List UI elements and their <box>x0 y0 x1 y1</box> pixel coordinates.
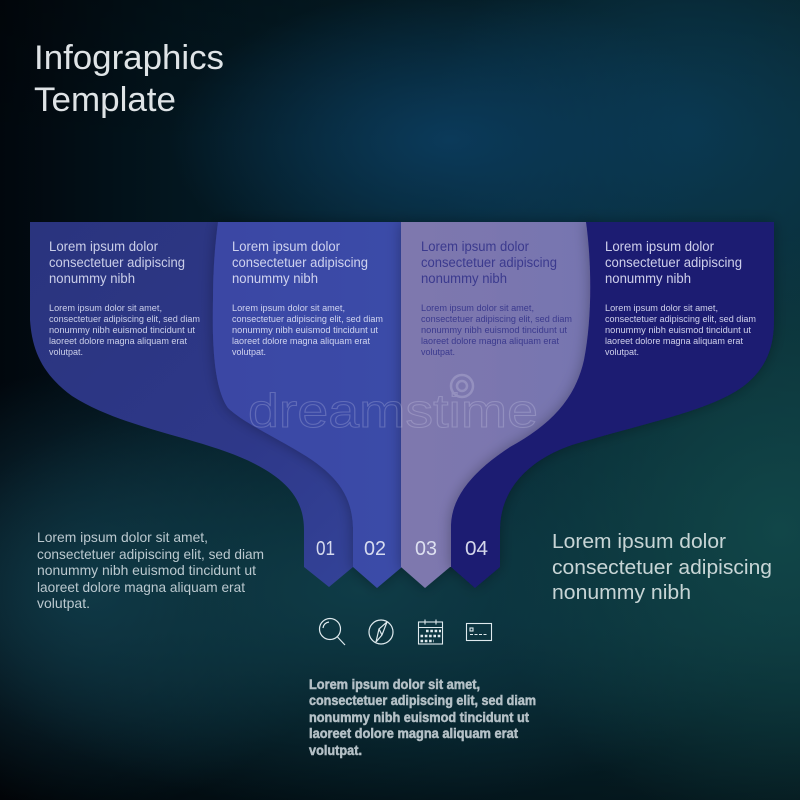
panel 3 shape <box>401 222 592 588</box>
icon: ID card <box>466 624 492 640</box>
bottom bold text block: consectetuer adipiscing elit, sed diam <box>309 692 536 708</box>
panel 2 text: consectetuer adipiscing <box>232 255 368 270</box>
panel 4 shape <box>451 222 774 588</box>
panel 4 text: nonummy nibh euismod tincidunt ut <box>605 325 751 336</box>
bottom bold text block <box>309 676 536 758</box>
bottom bold text block: laoreet dolore magna aliquam erat <box>309 725 518 741</box>
panel 1 text: Lorem ipsum dolor <box>49 239 158 254</box>
title: Infographics <box>34 39 224 77</box>
panel 2 text: nonummy nibh <box>232 271 318 286</box>
icon: magnifier <box>320 618 345 645</box>
panel 4 text: Lorem ipsum dolor sit amet, <box>605 303 718 314</box>
left text block: nonummy nibh euismod tincidunt ut <box>37 562 256 578</box>
icon: calendar <box>418 620 442 644</box>
panel 2 text: nonummy nibh euismod tincidunt ut <box>232 325 378 336</box>
panel 4 text: volutpat. <box>605 347 639 358</box>
watermark: dreamstime <box>248 384 538 437</box>
title: Template <box>34 81 176 119</box>
right text block <box>552 530 772 604</box>
panel 1 text: volutpat. <box>49 347 83 358</box>
panel 1 text <box>49 239 200 358</box>
panel 3 text: nonummy nibh <box>421 271 507 286</box>
panel 3 text: consectetuer adipiscing <box>421 255 557 270</box>
panel 4 text: nonummy nibh <box>605 271 691 286</box>
panel 2 text: Lorem ipsum dolor <box>232 239 340 254</box>
right text block: nonummy nibh <box>552 581 691 604</box>
panel 2 text: Lorem ipsum dolor sit amet, <box>232 303 345 314</box>
panel 1 text: Lorem ipsum dolor sit amet, <box>49 303 162 314</box>
step numbers <box>316 538 488 560</box>
panel 1 text: nonummy nibh euismod tincidunt ut <box>49 325 195 336</box>
left text block <box>37 529 264 611</box>
left text block: Lorem ipsum dolor sit amet, <box>37 529 208 545</box>
panel 2 text: consectetuer adipiscing elit, sed diam <box>232 314 383 325</box>
panel 4 text: consectetuer adipiscing <box>605 255 742 270</box>
panel 1 shape <box>30 222 390 587</box>
panel 4 text <box>605 239 756 358</box>
panel 2 text: laoreet dolore magna aliquam erat <box>232 336 370 347</box>
bottom bold text block: volutpat. <box>309 742 362 758</box>
left text block: volutpat. <box>37 595 90 611</box>
panel 2 text <box>232 239 383 358</box>
step numbers: 04 <box>465 538 488 560</box>
panel 2 shape <box>213 222 402 588</box>
panel 4 text: Lorem ipsum dolor <box>605 239 714 254</box>
panel 3 text: consectetuer adipiscing elit, sed diam <box>421 314 572 325</box>
panel 3 text: laoreet dolore magna aliquam erat <box>421 336 559 347</box>
funnel of four panels <box>30 222 774 588</box>
left text block: consectetuer adipiscing elit, sed diam <box>37 546 264 562</box>
panel 3 text: Lorem ipsum dolor sit amet, <box>421 303 534 314</box>
panel 4 text: laoreet dolore magna aliquam erat <box>605 336 743 347</box>
bottom bold text block: Lorem ipsum dolor sit amet, <box>309 676 480 692</box>
title <box>34 39 224 119</box>
panel 1 text: consectetuer adipiscing elit, sed diam <box>49 314 200 325</box>
step numbers: 02 <box>364 538 386 560</box>
panel 2 text: volutpat. <box>232 347 266 358</box>
panel 3 text: Lorem ipsum dolor <box>421 239 529 254</box>
right text block: Lorem ipsum dolor <box>552 530 726 553</box>
panel 3 text: volutpat. <box>421 347 455 358</box>
right text block: consectetuer adipiscing <box>552 556 772 579</box>
icon: compass <box>369 620 393 644</box>
panel 3 text: nonummy nibh euismod tincidunt ut <box>421 325 567 336</box>
panel 1 text: nonummy nibh <box>49 271 135 286</box>
panel 3 text <box>421 239 572 358</box>
panel 4 text: consectetuer adipiscing elit, sed diam <box>605 314 756 325</box>
left text block: laoreet dolore magna aliquam erat <box>37 579 245 595</box>
panel 1 text: consectetuer adipiscing <box>49 255 185 270</box>
bottom bold text block: nonummy nibh euismod tincidunt ut <box>309 709 529 725</box>
panel 1 text: laoreet dolore magna aliquam erat <box>49 336 187 347</box>
step numbers: 01 <box>316 538 335 560</box>
step numbers: 03 <box>415 538 437 560</box>
